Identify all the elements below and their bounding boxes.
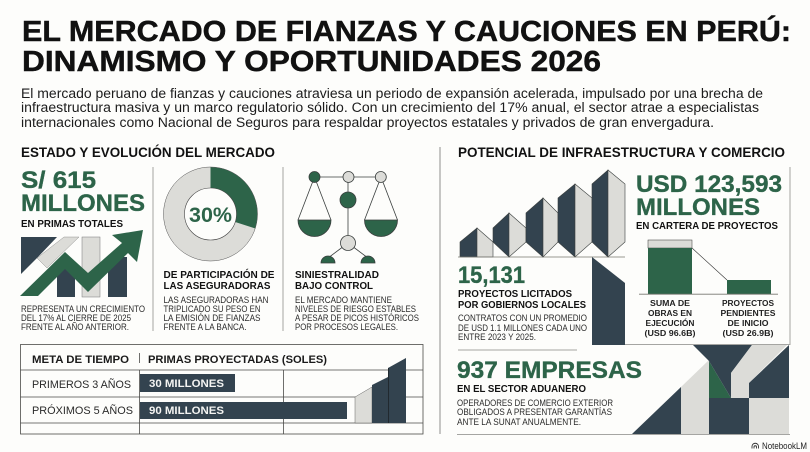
text: crecimiento: DEL 17% AL CIERRE DE 2025 bbox=[21, 313, 131, 323]
icon: geometric trade mosaic bbox=[632, 345, 789, 434]
row: próximos 5 años: PRÓXIMOS 5 AÑOS bbox=[32, 404, 133, 417]
text: participación: LAS ASEGURADORAS bbox=[164, 281, 271, 292]
stat: primas totales: MILLONES bbox=[21, 190, 145, 217]
text: siniestralidad bbox=[295, 270, 419, 332]
bar chart: obras bbox=[639, 240, 778, 338]
intro paragraph: infraestructura masiva y un marco regulatorio sólido. Con un crecimiento del 17% anual, el sector atrae a especialistas bbox=[21, 100, 759, 115]
label: proyectos pendientes: (USD 26.9B) bbox=[722, 328, 774, 338]
stat: proyectos licitados: PROYECTOS LICITADOS bbox=[458, 289, 572, 300]
donut chart: 30%: 30% bbox=[189, 204, 232, 227]
stat: empresas aduaneras: ANTE LA SUNAT ANUALMENTE. bbox=[457, 417, 581, 427]
text: siniestralidad: SINIESTRALIDAD bbox=[295, 270, 379, 281]
text: siniestralidad: BAJO CONTROL bbox=[295, 281, 373, 292]
text: siniestralidad: A PESAR DE PICOS HISTÓRICOS bbox=[295, 313, 419, 323]
row: primeros 3 años: PRIMEROS 3 AÑOS bbox=[32, 378, 131, 391]
text: siniestralidad: EL MERCADO MANTIENE bbox=[295, 295, 392, 305]
icon: rising steps bbox=[355, 358, 406, 423]
text: crecimiento: REPRESENTA UN CRECIMIENTO bbox=[21, 304, 145, 314]
donut chart: 30% bbox=[164, 167, 258, 261]
title bbox=[22, 14, 791, 78]
icon: balance scales bbox=[298, 172, 398, 263]
stat: proyectos licitados: ENTRE 2023 Y 2025. bbox=[458, 332, 536, 342]
text: siniestralidad: NIVELES DE RIESGO ESTABLES bbox=[295, 304, 416, 314]
row: primeros 3 años: 30 MILLONES bbox=[149, 378, 224, 390]
stat: cartera de proyectos: USD 123,593 bbox=[636, 171, 782, 198]
stat: proyectos licitados: DE USD 1.1 MILLONES CADA UNO bbox=[458, 323, 587, 333]
section heading: infraestructura: POTENCIAL DE INFRAESTRUCTURA Y COMERCIO bbox=[458, 144, 785, 160]
table header: META DE TIEMPO bbox=[32, 354, 129, 366]
label: proyectos pendientes: PROYECTOS bbox=[722, 298, 774, 308]
stat: proyectos licitados: POR GOBIERNOS LOCALES bbox=[458, 300, 586, 311]
label: obras en ejecución: (USD 96.6B) bbox=[644, 328, 696, 338]
label: obras en ejecución: SUMA DE bbox=[650, 298, 690, 308]
icon: growth arrow chart bbox=[20, 230, 143, 297]
stat: cartera de proyectos bbox=[636, 171, 782, 232]
label: obras en ejecución: EJECUCIÓN bbox=[646, 317, 694, 328]
table: primas proyectadas bbox=[20, 344, 423, 434]
icon: rising hexagon buildings bbox=[458, 170, 625, 257]
text: participación: TRIPLICADO SU PESO EN bbox=[164, 304, 260, 314]
stat: empresas aduaneras: EN EL SECTOR ADUANERO bbox=[457, 384, 586, 395]
title: DINAMISMO Y OPORTUNIDADES 2026 bbox=[22, 46, 601, 78]
stat: proyectos licitados: 15,131 bbox=[458, 262, 525, 289]
stat: empresas aduaneras: OBLIGADOS A PRESENTAR GARANTÍAS bbox=[457, 407, 612, 417]
text: participación: DE PARTICIPACIÓN DE bbox=[164, 268, 275, 281]
panel: potencial de infraestructura y comercio bbox=[457, 144, 790, 434]
text: siniestralidad: POR PROCESOS LEGALES. bbox=[295, 322, 398, 332]
stat: cartera de proyectos: MILLONES bbox=[636, 194, 760, 221]
text: participación: FRENTE A LA BANCA. bbox=[164, 322, 246, 332]
text: participación: LA EMISIÓN DE FIANZAS bbox=[164, 313, 261, 323]
table header: PRIMAS PROYECTADAS (SOLES) bbox=[148, 354, 327, 366]
label: obras en ejecución bbox=[644, 298, 696, 338]
title: EL MERCADO DE FIANZAS Y CAUCIONES EN PERÚ: bbox=[22, 14, 791, 48]
stat: primas totales: EN PRIMAS TOTALES bbox=[21, 219, 123, 230]
text: crecimiento bbox=[21, 304, 145, 332]
row: primeros 3 años bbox=[32, 374, 235, 392]
row: próximos 5 años: 90 MILLONES bbox=[149, 405, 224, 417]
label: proyectos pendientes bbox=[720, 298, 776, 338]
stat: empresas aduaneras: OPERADORES DE COMERCIO EXTERIOR bbox=[457, 398, 613, 408]
icon: dark geometric block bbox=[592, 257, 625, 345]
text: participación: LAS ASEGURADORAS HAN bbox=[164, 295, 268, 305]
row: próximos 5 años bbox=[32, 402, 347, 419]
stat: primas totales: S/ 615 bbox=[21, 167, 96, 194]
center divider bbox=[439, 147, 441, 434]
text: crecimiento: FRENTE AL AÑO ANTERIOR. bbox=[21, 322, 129, 332]
panel: estado y evolución del mercado bbox=[20, 143, 419, 332]
intro paragraph bbox=[21, 86, 763, 130]
label: proyectos pendientes: DE INICIO bbox=[728, 318, 769, 328]
table header bbox=[32, 354, 327, 366]
intro paragraph: internacionales como Nacional de Seguros para respaldar proyectos estatales y privados de gran envergadura. bbox=[21, 115, 714, 130]
stat: empresas aduaneras: 937 EMPRESAS bbox=[457, 357, 642, 384]
text: participación bbox=[164, 268, 275, 332]
stat: proyectos licitados: CONTRATOS CON UN PROMEDIO bbox=[458, 313, 587, 323]
intro paragraph: El mercado peruano de fianzas y cauciones atraviesa un periodo de expansión acelerada, impulsado por una brecha de bbox=[21, 86, 763, 101]
label: proyectos pendientes: PENDIENTES bbox=[720, 308, 776, 318]
label: obras en ejecución: OBRAS EN bbox=[648, 308, 692, 318]
stat: cartera de proyectos: EN CARTERA DE PROYECTOS bbox=[636, 221, 778, 232]
stat: proyectos licitados bbox=[458, 262, 587, 342]
stat: primas totales bbox=[21, 167, 145, 230]
stat: empresas aduaneras bbox=[457, 357, 642, 427]
section heading: mercado: ESTADO Y EVOLUCIÓN DEL MERCADO bbox=[21, 143, 275, 160]
